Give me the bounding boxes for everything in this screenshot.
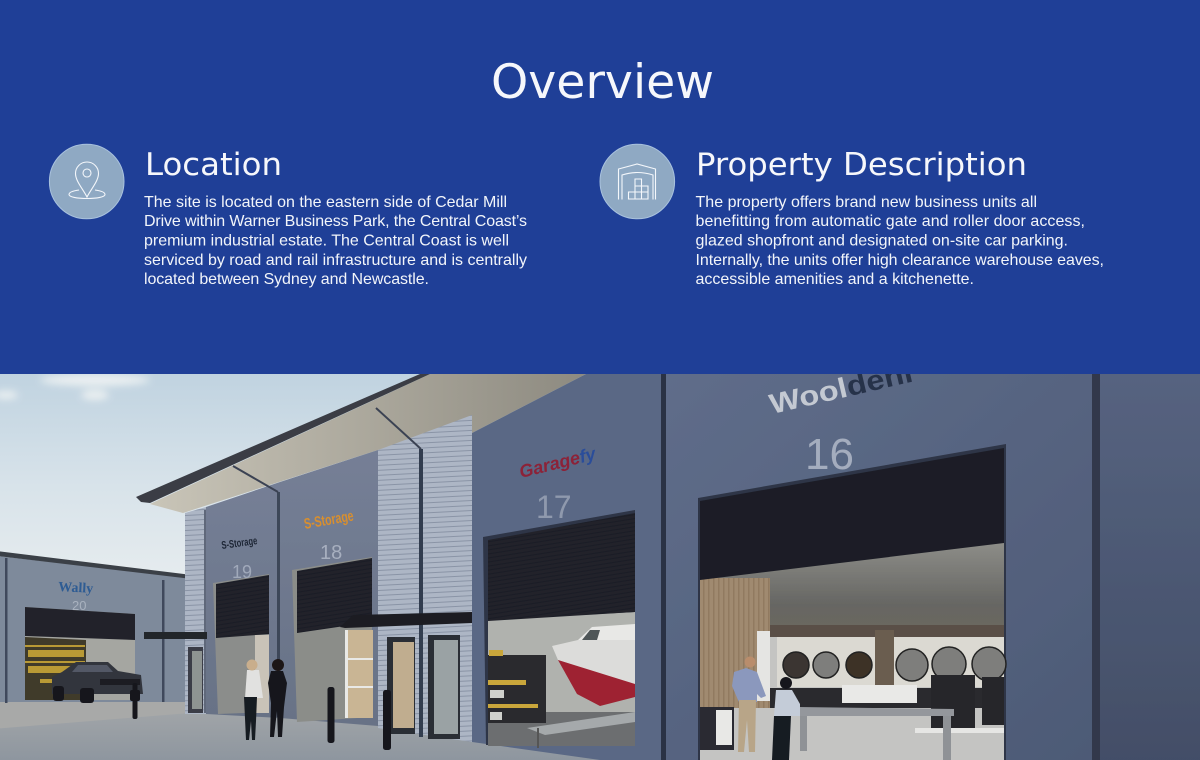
text block: property description: The property offers brand new business units all bbox=[696, 194, 1037, 211]
far building: unit 20: 20 bbox=[72, 598, 86, 613]
people inside bbox=[732, 656, 800, 760]
door: unit 17 bbox=[483, 510, 635, 746]
boat bbox=[527, 624, 635, 748]
wall signage and unit numbers: 17 bbox=[536, 489, 572, 525]
text block: property description bbox=[696, 194, 1104, 288]
text block: location: located between Sydney and Newcastle. bbox=[144, 271, 429, 288]
door: unit 18 bbox=[292, 557, 373, 722]
text block: location: premium industrial estate. The Central Coast is well bbox=[144, 232, 509, 250]
door: unit 16 bbox=[698, 444, 1006, 760]
heading: location: Location bbox=[145, 147, 282, 183]
door: unit 19 bbox=[213, 574, 269, 714]
roof and soffit bbox=[136, 374, 586, 513]
bollards bbox=[132, 683, 391, 750]
wall signage and unit numbers: 19 bbox=[232, 562, 252, 582]
glazed shopfront doors bbox=[188, 635, 460, 739]
sky bbox=[0, 374, 586, 574]
far building: unit 20 bbox=[0, 549, 192, 703]
wall signage and unit numbers bbox=[221, 357, 916, 582]
panel: location bbox=[49, 144, 527, 288]
ground bbox=[0, 697, 700, 760]
people outside bbox=[244, 659, 287, 740]
text block: property description: accessible amenities and a kitchenette. bbox=[696, 271, 974, 288]
truck bbox=[52, 662, 143, 703]
wall signage and unit numbers: 18 bbox=[320, 542, 342, 564]
main building: left side walls bbox=[185, 408, 472, 742]
shelving in unit 17 bbox=[488, 650, 546, 723]
far building: unit 20: Wally bbox=[58, 580, 94, 597]
wall signage and unit numbers: Wooldeni bbox=[766, 357, 916, 420]
text block: location: serviced by road and rail infrastructure and is centrally bbox=[144, 252, 527, 269]
wall signage and unit numbers: 16 bbox=[805, 430, 854, 479]
text block: location bbox=[144, 194, 527, 288]
wall signage and unit numbers: Garagefy bbox=[517, 443, 599, 482]
wall signage and unit numbers: S-Storage bbox=[221, 535, 258, 552]
blue background panel bbox=[0, 0, 1200, 374]
main building: right walls bbox=[472, 374, 1200, 760]
illustration: warehouse units photo bbox=[0, 357, 1200, 760]
icon: location pin bbox=[49, 144, 124, 219]
text block: property description: glazed shopfront and designated on-site car parking. bbox=[696, 232, 1068, 250]
title: Overview bbox=[491, 55, 714, 110]
canopies bbox=[144, 612, 472, 639]
text block: property description: benefitting from automatic gate and roller door access, bbox=[696, 213, 1085, 230]
showroom interior bbox=[700, 631, 1006, 760]
icon: warehouse bbox=[600, 144, 675, 219]
panel: property description bbox=[600, 144, 1104, 288]
text block: location: Drive within Warner Business Park, the Central Coast’s bbox=[144, 213, 527, 230]
heading: property description: Property Description bbox=[696, 147, 1027, 183]
text block: location: The site is located on the eastern side of Cedar Mill bbox=[144, 194, 507, 211]
text block: property description: Internally, the units offer high clearance warehouse eaves, bbox=[696, 252, 1104, 269]
wall signage and unit numbers: S-Storage bbox=[303, 508, 355, 533]
